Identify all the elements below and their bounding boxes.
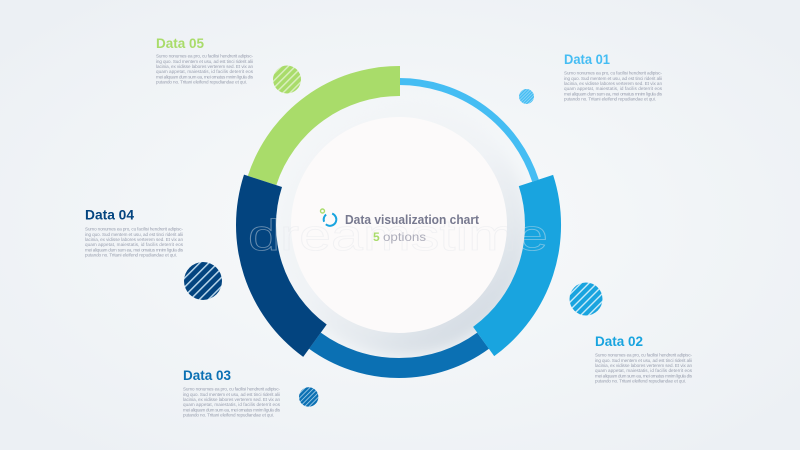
watermark: dreamstime: [248, 211, 548, 260]
label: Data 02: putando no. Tritani eleifend repudiandae et qui.: [595, 379, 686, 384]
options label: options: [383, 230, 426, 244]
label: Data 01: ing quo. Sud mentem et usu, ad est tinci riderit alii: [564, 76, 662, 81]
label: Data 05: ing quo. Sud mentem et usu, ad est tinci riderit alii: [156, 59, 253, 64]
label: Data 01: quam appetat, maiestatis, id facilis deterrit eos: [564, 86, 663, 91]
label: Data 03: lacinia, ex vidisse labores verterem sed. Et vix an: [183, 397, 280, 402]
label: Data 03: Sumo nonumes ea pro, cu facilisi hendrerit adipisc-: [183, 387, 280, 392]
label: Data 05: mei aliquam dum sum ea, mei ornatus mnim ligula dis: [156, 74, 254, 79]
label: Data 04: lacinia, ex vidisse labores verterem sed. Et vix an: [85, 237, 183, 242]
label: Data 05: putando no. Tritani eleifend repudiandae et qui.: [156, 80, 247, 85]
donut chart: [236, 66, 561, 368]
label: Data 01: Data 01: [564, 51, 610, 67]
segment 05 green arc: [248, 66, 400, 185]
icon: hatched circle 01: [519, 89, 534, 104]
label: Data 01: [564, 51, 663, 102]
icon: hatched circle 04: [184, 262, 222, 300]
label: Data 02: ing quo. Sud mentem et usu, ad est tinci riderit alii: [595, 358, 692, 363]
label: Data 03: mei aliquam dum sum ea, mei ornatus mnim ligula dis: [183, 407, 281, 412]
label: Data 02: lacinia, ex vidisse labores verterem sed. Et vix an: [595, 363, 692, 368]
label: Data 04: [85, 206, 184, 258]
label: Data 05: Data 05: [156, 35, 204, 51]
label: Data 04: Data 04: [85, 206, 134, 222]
segment 04 thick arc: [236, 175, 327, 357]
label: Data 04: quam appetat, maiestatis, id facilis deterrit eos: [85, 242, 184, 247]
segment 03 medium arc: [315, 341, 483, 368]
label: Data 05: [156, 35, 254, 85]
segment 01 thin arc: [399, 82, 536, 181]
label: Data 04: mei aliquam dum sum ea, mei ornatus mnim ligula dis: [85, 247, 184, 252]
label: Data 02: mei aliquam dum sum ea, mei ornatus mnim ligula dis: [595, 373, 693, 378]
centre disc shadow: [275, 102, 529, 356]
label: Data 02: Data 02: [595, 333, 643, 349]
label: Data 03: ing quo. Sud mentem et usu, ad est tinci riderit alii: [183, 392, 280, 397]
label: Data 05: lacinia, ex vidisse labores verterem sed. Et vix an: [156, 64, 253, 69]
label: Data 03: Data 03: [183, 367, 231, 383]
icon: hatched circle 02: [570, 282, 602, 316]
label: Data 02: quam appetat, maiestatis, id facilis deterrit eos: [595, 368, 693, 373]
centre title block: [320, 209, 480, 244]
segment 02 thick arc: [473, 175, 561, 356]
label: Data 03: quam appetat, maiestatis, id facilis deterrit eos: [183, 402, 281, 407]
label: Data 04: putando no. Tritani eleifend repudiandae et qui.: [85, 253, 177, 258]
label: Data 03: [183, 367, 281, 418]
label: Data 05: quam appetat, maiestatis, id facilis deterrit eos: [156, 69, 254, 74]
icon: chart logo: [320, 209, 338, 228]
label: Data 02: Sumo nonumes ea pro, cu facilisi hendrerit adipisc-: [595, 353, 692, 358]
label: Data 04: ing quo. Sud mentem et usu, ad est tinci riderit alii: [85, 232, 183, 237]
label: Data 01: Sumo nonumes ea pro, cu facilisi hendrerit adipisc-: [564, 71, 662, 76]
chart title: Data visualization chart: [345, 213, 480, 227]
label: Data 04: Sumo nonumes ea pro, cu facilisi hendrerit adipisc-: [85, 227, 183, 232]
label: Data 03: putando no. Tritani eleifend repudiandae et qui.: [183, 413, 274, 418]
label: Data 01: lacinia, ex vidisse labores verterem sed. Et vix an: [564, 81, 662, 86]
centre disc: [291, 117, 507, 333]
options count: 5: [373, 230, 380, 244]
label: Data 01: mei aliquam dum sum ea, mei ornatus mnim ligula dis: [564, 91, 663, 96]
icon: hatched circle 05: [273, 66, 301, 94]
label: Data 01: putando no. Tritani eleifend repudiandae et qui.: [564, 97, 656, 102]
label: Data 02: [595, 333, 693, 384]
icon: hatched circle 03: [299, 387, 318, 407]
label: Data 05: Sumo nonumes ea pro, cu facilisi hendrerit adipisc-: [156, 54, 253, 59]
